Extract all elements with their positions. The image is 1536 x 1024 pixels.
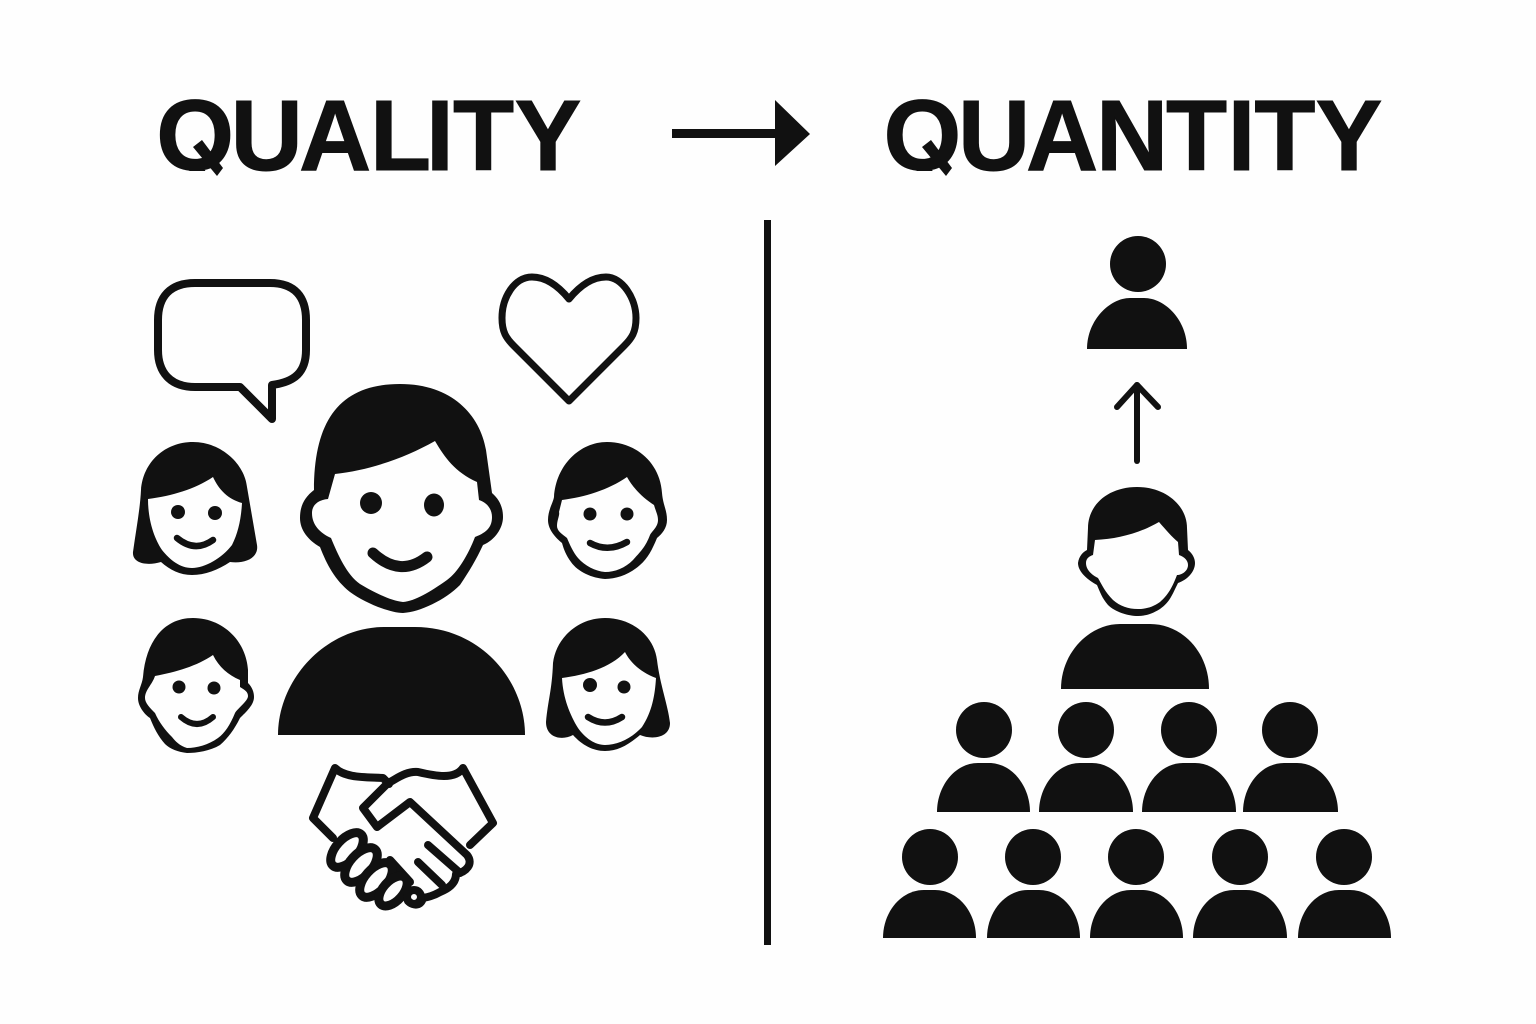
icon: speech bubble [158,283,306,419]
icon: large central person [278,384,525,735]
icon: boy bottom left [138,618,254,753]
icon: top person [1087,236,1187,349]
title: quantity: QUANTITY [884,80,1382,192]
arrow: upward [1117,385,1158,461]
icon: handshake [313,768,493,911]
icon: heart [502,277,636,401]
panel: quality [133,277,670,911]
vertical divider [764,220,771,945]
icon: woman bottom right [546,618,670,751]
arrow: quality to quantity [672,100,810,166]
icon: woman top left [133,442,257,575]
icon: boy top right [548,442,667,579]
crowd row: five people [883,829,1391,938]
crowd row: four people [937,702,1338,812]
panel: quantity [883,236,1391,938]
icon: middle person [1061,487,1209,689]
title: quality: QUALITY [156,80,581,192]
